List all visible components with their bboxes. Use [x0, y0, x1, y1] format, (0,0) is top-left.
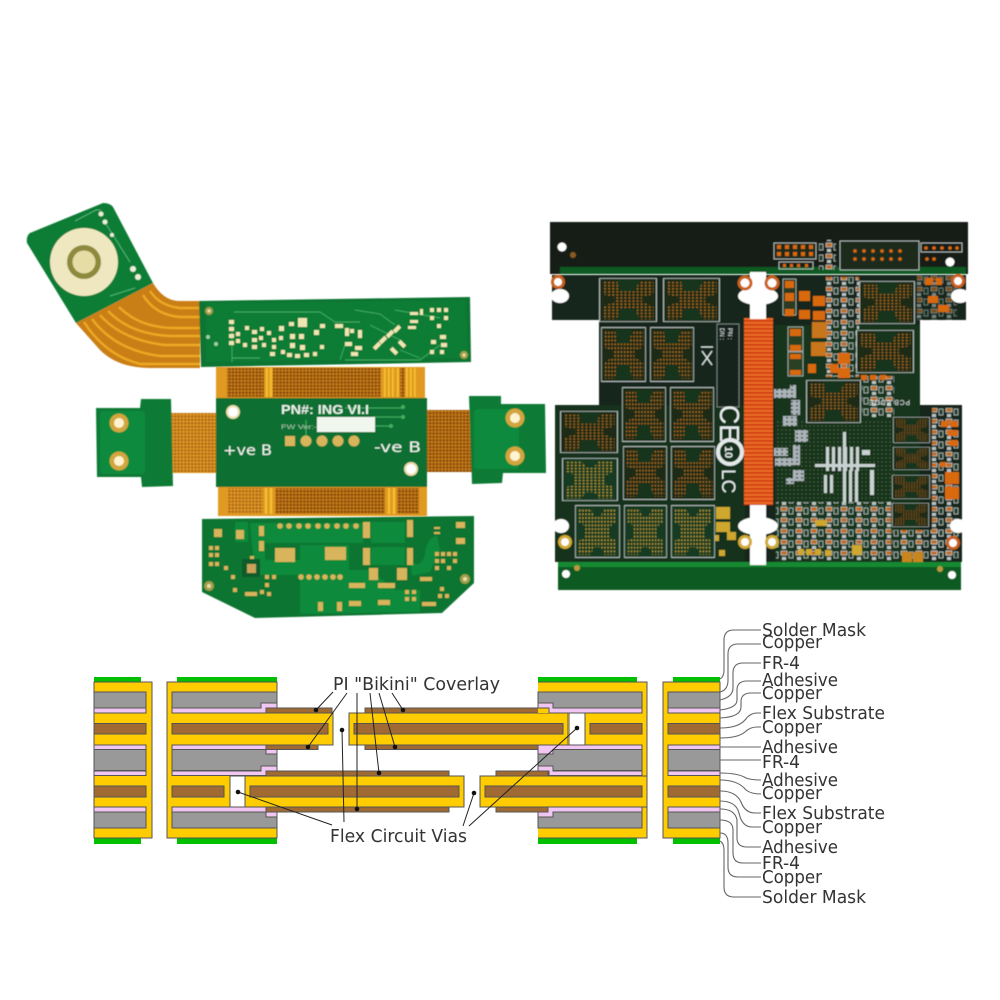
layer labels: Copper [762, 684, 823, 704]
layer leader lines [720, 630, 761, 897]
photo: rigid-flex PCB with green boards and amber flex [27, 203, 546, 618]
lower-left flex arm [245, 771, 464, 812]
gold SMD pads [715, 507, 862, 556]
flex mesh top [216, 367, 425, 400]
sensor board [27, 203, 153, 323]
callout: PI Bikini Coverlay [306, 675, 500, 811]
markings: PN, CE, recycle, PCB EDGE: PCB EDGE [869, 398, 910, 405]
fine via field [776, 420, 894, 510]
upper-left flex arm [168, 708, 333, 750]
layer labels: FR-4 [762, 654, 800, 674]
main board outline [552, 275, 966, 562]
layer labels: FR-4 [762, 854, 800, 874]
middle rigid board [216, 398, 427, 487]
right green-dark area [775, 325, 920, 562]
silver traces and test pads [774, 385, 875, 502]
markings: PN, CE, recycle, PCB EDGE [701, 324, 910, 493]
middle rigid board: PN#: ING VI.I [281, 402, 369, 417]
photo: dark rigid-flex PCB with BGA footprints [550, 222, 969, 590]
right rigid stack [663, 677, 720, 844]
layer labels: Copper [762, 718, 823, 738]
slots and mounting holes [551, 272, 969, 565]
layer labels: Copper [762, 868, 823, 888]
bottom rigid board [202, 516, 474, 618]
layer labels: Flex Substrate [762, 804, 885, 824]
callout: Flex Circuit Vias: Flex Circuit Vias [330, 827, 467, 847]
markings: PN, CE, recycle, PCB EDGE: 10 [722, 446, 734, 458]
layer labels: Copper [762, 784, 823, 804]
flex mesh right [426, 410, 472, 472]
markings: PN, CE, recycle, PCB EDGE: LC [717, 469, 738, 493]
centre-right rigid block [480, 677, 647, 844]
lower-left green area [555, 405, 745, 562]
layer labels: Adhesive [762, 771, 838, 791]
layer labels: Solder Mask [762, 621, 867, 641]
upper-right flex arm [349, 708, 568, 750]
middle rigid board: +ve B [223, 443, 272, 459]
orange flex section [744, 318, 773, 505]
left rigid stack [94, 677, 152, 844]
diagram: rigid-flex stackup cross-section [94, 677, 720, 844]
centre-left rigid block [167, 677, 277, 844]
layer labels: Solder Mask [762, 888, 867, 908]
layer labels: Adhesive [762, 838, 838, 858]
middle rigid board: -ve B [374, 440, 421, 456]
top break-away strip [550, 222, 968, 274]
top rigid board [199, 297, 471, 367]
right tab board [469, 396, 546, 484]
markings: PN, CE, recycle, PCB EDGE: DN : [718, 328, 724, 340]
flex mesh bottom [218, 486, 427, 516]
markings: PN, CE, recycle, PCB EDGE: CE [714, 405, 745, 442]
layer labels [762, 621, 885, 908]
large orange pads [783, 278, 959, 562]
BGA footprints [561, 278, 930, 557]
layer labels: Flex Substrate [762, 704, 885, 724]
middle rigid board: FW Ver:- [281, 424, 317, 431]
layer labels: Copper [762, 818, 823, 838]
callout: PI Bikini Coverlay: PI "Bikini" Coverlay [333, 675, 500, 695]
layer labels: FR-4 [762, 753, 800, 773]
dense SMD fields [776, 276, 960, 560]
left tab board [96, 399, 173, 487]
callout: Flex Circuit Vias [236, 726, 579, 847]
markings: PN, CE, recycle, PCB EDGE: PN : [726, 328, 732, 340]
layer labels: Adhesive [762, 738, 838, 758]
bottom break-away strip [558, 562, 961, 590]
flex mesh left [171, 413, 218, 473]
layer labels: Copper [762, 633, 823, 653]
lower-right flex arm [480, 771, 646, 812]
flex tail with gold traces [76, 283, 200, 368]
layer labels: Adhesive [762, 671, 838, 691]
